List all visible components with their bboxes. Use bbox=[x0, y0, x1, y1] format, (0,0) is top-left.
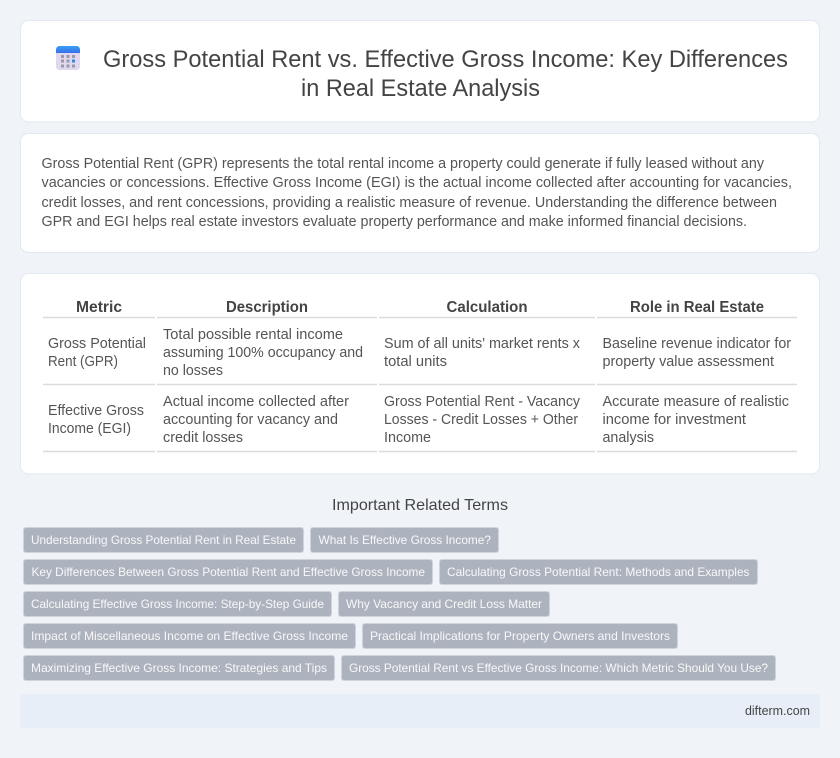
table row: Effective Gross Income: Actual income collected after bbox=[163, 394, 349, 410]
tag: Impact of Miscellaneous Income on Effective Gross Income bbox=[31, 629, 348, 643]
text block: definition of GPR and EGI bbox=[42, 156, 792, 230]
title: Gross Potential Rent vs. Effective Gross Income: Key Differences bbox=[103, 46, 788, 73]
tag: Why Vacancy and Credit Loss Matter bbox=[346, 597, 542, 611]
tag bbox=[440, 560, 758, 584]
text block: definition of GPR and EGI: credit losses, and rent concessions, providing a realistic measure of revenue. Understanding the difference between bbox=[42, 195, 777, 211]
table header row: Role in Real Estate bbox=[630, 299, 764, 316]
table header row: Description bbox=[226, 299, 308, 316]
table row: Effective Gross Income: Income bbox=[384, 430, 431, 446]
tag: Calculating Gross Potential Rent: Methods and Examples bbox=[447, 565, 750, 579]
panel: comparison table bbox=[20, 274, 820, 474]
text block: definition of GPR and EGI: Gross Potential Rent (GPR) represents the total rental income a property could generate if fully leased without any bbox=[42, 156, 765, 172]
footer source: difterm.com bbox=[745, 703, 810, 718]
table row: Effective Gross Income: Gross Potential Rent - Vacancy bbox=[384, 394, 581, 410]
table row: Gross Potential Rent: property value assessment bbox=[602, 354, 774, 370]
table row: Gross Potential Rent: no losses bbox=[163, 363, 223, 379]
tag: Practical Implications for Property Owners and Investors bbox=[370, 629, 670, 643]
table header row: Calculation bbox=[446, 299, 528, 316]
tag bbox=[338, 592, 550, 616]
tag bbox=[24, 624, 356, 648]
table row: Effective Gross Income: Effective Gross bbox=[48, 403, 144, 419]
table row: Gross Potential Rent: Sum of all units' market rents x bbox=[384, 336, 581, 352]
tag: Calculating Effective Gross Income: Step-by-Step Guide bbox=[31, 597, 324, 611]
heading: related terms: Important Related Terms bbox=[332, 497, 508, 514]
panel: summary paragraph bbox=[20, 134, 820, 252]
table header row: Metric bbox=[76, 299, 122, 316]
table row: Gross Potential Rent: Baseline revenue indicator for bbox=[602, 336, 791, 352]
tag bbox=[24, 656, 334, 680]
tag bbox=[24, 592, 332, 616]
related terms tags bbox=[24, 528, 776, 680]
table row: Effective Gross Income: Accurate measure of realistic bbox=[602, 394, 789, 410]
tag bbox=[310, 528, 498, 552]
table row: Effective Gross Income: credit losses bbox=[163, 430, 243, 446]
title: in Real Estate Analysis bbox=[301, 75, 540, 102]
table row: Gross Potential Rent: Rent (GPR) bbox=[48, 354, 118, 370]
table row: Gross Potential Rent: Total possible rental income bbox=[163, 327, 343, 343]
table row: Gross Potential Rent bbox=[48, 327, 791, 379]
tag bbox=[362, 624, 678, 648]
tag: What Is Effective Gross Income? bbox=[318, 533, 491, 547]
tag: Gross Potential Rent vs Effective Gross Income: Which Metric Should You Use? bbox=[349, 661, 768, 675]
tag: Understanding Gross Potential Rent in Real Estate bbox=[31, 533, 296, 547]
table row: Effective Gross Income: accounting for vacancy and bbox=[163, 412, 338, 428]
table row: Effective Gross Income: income for investment bbox=[602, 412, 746, 428]
text block: definition of GPR and EGI: GPR and EGI helps real estate investors evaluate property performance and make informed financial decisions. bbox=[42, 214, 747, 230]
tag: Maximizing Effective Gross Income: Strategies and Tips bbox=[31, 661, 327, 675]
icon: calendar bbox=[56, 46, 80, 70]
table header row bbox=[76, 299, 764, 316]
table row: Effective Gross Income bbox=[48, 394, 789, 446]
table row: Effective Gross Income: Losses - Credit Losses + Other bbox=[384, 412, 578, 428]
table row: Gross Potential Rent: Gross Potential bbox=[48, 336, 146, 352]
table row: Effective Gross Income: Income (EGI) bbox=[48, 421, 131, 437]
tag bbox=[24, 560, 432, 584]
title bbox=[103, 46, 788, 102]
footer bar bbox=[20, 694, 820, 728]
tag: Key Differences Between Gross Potential Rent and Effective Gross Income bbox=[32, 565, 425, 579]
table row: Effective Gross Income: analysis bbox=[602, 430, 654, 446]
table row: Gross Potential Rent: assuming 100% occupancy and bbox=[163, 345, 363, 361]
tag bbox=[342, 656, 776, 680]
text block: definition of GPR and EGI: vacancies or concessions. Effective Gross Income (EGI) is the actual income collected after accounting for vacancies, bbox=[42, 175, 792, 191]
tag bbox=[24, 528, 304, 552]
header panel bbox=[20, 20, 820, 122]
table row: Gross Potential Rent: total units bbox=[384, 354, 447, 370]
